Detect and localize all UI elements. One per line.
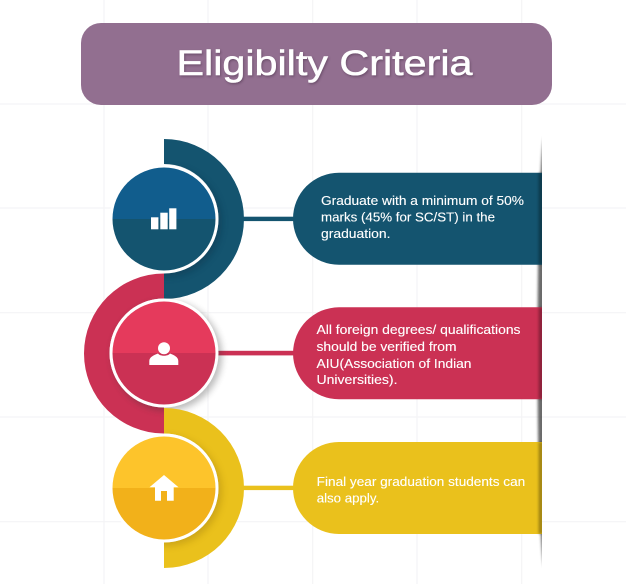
- icon circle red: [110, 298, 218, 408]
- text: final year students: also apply.: [317, 491, 379, 506]
- title banner: [81, 23, 552, 105]
- text: foreign degrees: All foreign degrees/ qualifications: [316, 322, 521, 337]
- ring shadow yellow: [164, 435, 224, 548]
- icon: bar chart: [151, 208, 176, 229]
- text: foreign degrees: should be verified from: [316, 339, 456, 354]
- connector line yellow: [240, 486, 298, 490]
- connector line blue: [240, 217, 298, 221]
- icon: person: [149, 342, 178, 365]
- vertical edge shadow: [536, 138, 542, 566]
- text: graduation requirement: Graduate with a minimum of 50%: [321, 193, 524, 208]
- half ring blue: [164, 139, 244, 299]
- text: graduation requirement: graduation.: [321, 226, 390, 241]
- vertical edge shadow over panels: [538, 173, 544, 534]
- ring shadow blue: [164, 164, 222, 277]
- text: foreign degrees: [316, 322, 521, 387]
- icon circle yellow: [110, 434, 218, 542]
- half ring red: [84, 274, 164, 434]
- panel: graduation requirement: [293, 173, 542, 265]
- step 2: foreign degrees: [84, 274, 542, 434]
- title: Eligibilty Criteria: [176, 44, 473, 83]
- icon: house: [150, 475, 178, 501]
- step 1: graduation marks: [110, 139, 542, 299]
- text: foreign degrees: Universities).: [316, 372, 398, 387]
- panel: final year students: [293, 442, 542, 534]
- half ring yellow: [164, 408, 244, 568]
- text: foreign degrees: AIU(Association of Indian: [316, 356, 472, 371]
- circle shadow red: [112, 301, 222, 411]
- text: graduation requirement: marks (45% for SC/ST) in the: [321, 209, 495, 224]
- text: graduation requirement: [321, 193, 524, 241]
- panel: foreign degrees: [293, 307, 542, 399]
- text: final year students: [317, 474, 525, 506]
- icon circle blue: [110, 164, 218, 274]
- text: final year students: Final year graduation students can: [317, 474, 525, 489]
- connector line red: [210, 351, 298, 355]
- step 3: final year students: [110, 408, 542, 568]
